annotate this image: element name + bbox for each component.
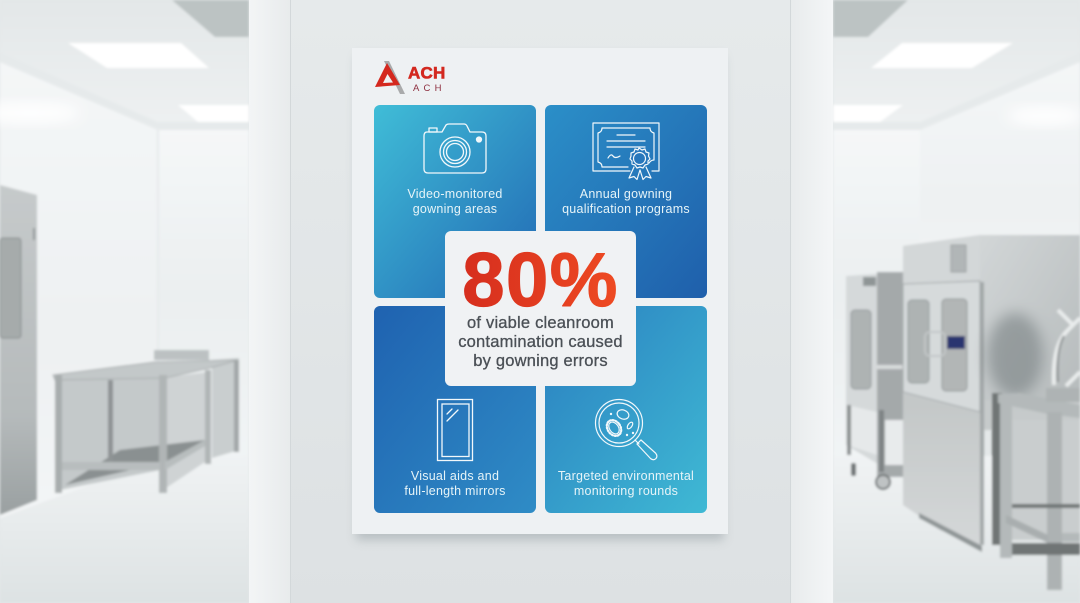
statistic description line 2: contamination caused bbox=[458, 333, 623, 351]
caption: annual gowning: Annual gowning bbox=[580, 187, 672, 201]
front table with silver object bbox=[992, 393, 1002, 545]
logo: ACH bbox=[375, 61, 446, 94]
caption: full-length mirrors: full-length mirrors bbox=[404, 484, 506, 498]
main cabinet bbox=[902, 392, 1080, 431]
panel: annual gowning qualification programs bbox=[545, 105, 707, 298]
icon: full-length mirror bbox=[438, 400, 472, 460]
statistic description line 3: by gowning errors bbox=[473, 352, 608, 370]
caption: video-monitored: Video-monitored bbox=[407, 187, 503, 201]
panel: video-monitored gowning areas bbox=[374, 105, 536, 298]
caption: targeted environmental: Targeted environmental bbox=[558, 469, 694, 483]
poster board bbox=[352, 48, 728, 534]
caption: visual aids and: Visual aids and bbox=[411, 469, 499, 483]
caption: monitoring rounds: monitoring rounds bbox=[574, 484, 678, 498]
panel: targeted environmental monitoring bbox=[545, 306, 707, 513]
icon: certificate with ribbon seal bbox=[593, 123, 659, 180]
background: right cleanroom with equipment bbox=[833, 0, 1080, 603]
statistic description line 1: of viable cleanroom bbox=[467, 314, 614, 332]
icon: magnifier over petri dish bbox=[596, 400, 657, 460]
background: central wall and columns bbox=[249, 0, 833, 603]
poster bbox=[352, 48, 728, 534]
icon: camera bbox=[424, 124, 486, 173]
background: left cleanroom bbox=[0, 0, 249, 517]
far cabinet bbox=[846, 274, 878, 463]
logo: ACH: ACH bbox=[413, 83, 446, 94]
logo: ACH: ACH bbox=[408, 64, 445, 82]
poster shadow bbox=[356, 56, 724, 540]
big number: 80% bbox=[462, 238, 619, 323]
caption: gowning areas: gowning areas bbox=[413, 202, 497, 216]
panel: visual aids and mirrors bbox=[374, 306, 536, 513]
caption: qualification programs: qualification programs bbox=[562, 202, 690, 216]
callout: 80% statistic bbox=[445, 231, 636, 386]
